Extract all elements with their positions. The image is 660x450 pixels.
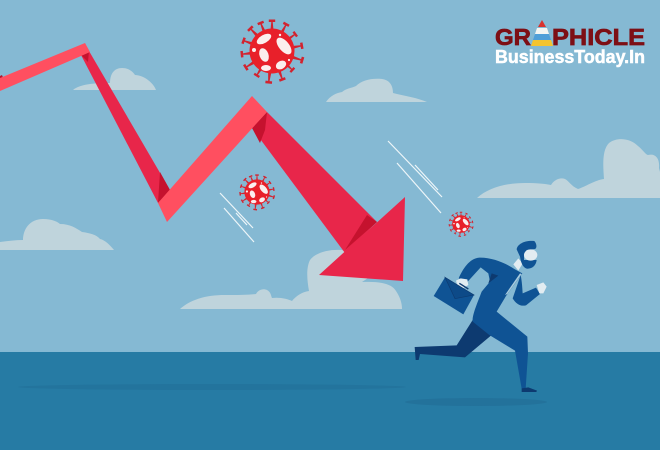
sky background	[0, 0, 660, 352]
segment: second rise	[158, 96, 267, 222]
logo: GRAPHICLE wordmark	[495, 24, 645, 50]
cloud: centre bottom	[180, 250, 402, 309]
front arm	[513, 275, 540, 306]
ground shadow: long	[18, 384, 406, 390]
cloud: right	[477, 139, 660, 198]
front hand	[537, 282, 547, 293]
running businessman	[415, 241, 547, 392]
cloud: left	[0, 219, 114, 250]
shoe	[522, 387, 537, 392]
segment: first rise	[0, 43, 90, 91]
logo	[495, 20, 645, 67]
falling red arrow chart	[0, 43, 405, 281]
briefcase handle	[459, 283, 468, 289]
arrow head	[319, 197, 405, 281]
ground shadow: runner	[405, 398, 547, 406]
shirt lapel	[505, 273, 522, 295]
icon: large virus	[240, 20, 304, 84]
back hand	[456, 278, 468, 288]
icon: small virus	[449, 212, 474, 237]
sea	[0, 352, 660, 450]
armpit shadow	[488, 273, 498, 283]
face	[524, 249, 537, 261]
speed lines: centre	[220, 193, 254, 242]
neck	[513, 258, 523, 271]
logo: BusinessToday.In: BusinessToday.In	[495, 46, 645, 67]
segment: main drop	[252, 112, 377, 253]
torso and front leg	[459, 258, 528, 389]
cloud: upper centre	[326, 79, 427, 102]
speed lines: right	[388, 141, 442, 213]
hair and beard	[517, 241, 537, 269]
segment: first drop	[81, 51, 170, 203]
logo: pyramid A	[531, 20, 553, 46]
logo: GRAPHICLE wordmark: GR	[495, 24, 531, 50]
back leg	[415, 320, 492, 360]
briefcase	[434, 277, 474, 314]
icon: medium virus	[239, 174, 275, 210]
logo: GRAPHICLE wordmark: PHICLE	[552, 24, 645, 50]
cloud: upper left	[73, 68, 156, 90]
